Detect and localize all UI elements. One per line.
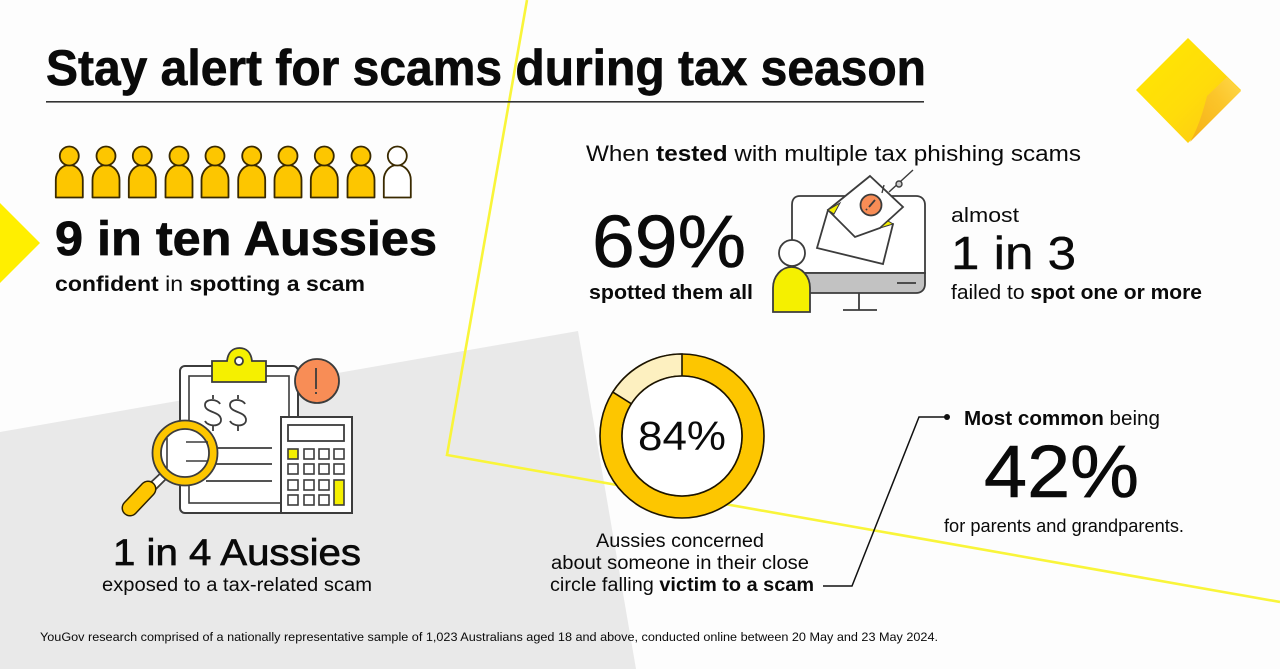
donut chart: 84%: 84% (638, 413, 726, 459)
stat: 1 in 4 Aussies: 1 in 4 Aussies (113, 532, 361, 573)
donut chart: 84% (611, 354, 753, 507)
yellow accent lines (447, 0, 1280, 602)
caption: failed to spot one or more: failed to spot one or more (951, 281, 1202, 304)
caption: Most common being: Most common being (964, 407, 1160, 430)
caption: exposed to a tax-related scam: exposed to a tax-related scam (102, 575, 372, 596)
title: Stay alert for scams during tax season (46, 40, 926, 96)
stat: 42%: 42% (984, 430, 1139, 513)
stat: 1 in 3: 1 in 3 (951, 227, 1076, 279)
caption: Aussies concerned (550, 531, 814, 596)
yellow diamond left edge (0, 203, 40, 283)
caption: almost: almost (951, 204, 1019, 227)
people row icon (56, 146, 411, 198)
caption: Aussies concerned: circle falling victim to a scam (550, 575, 814, 596)
text: almost 1 in 3 (951, 204, 1202, 304)
icon: computer with phishing email (773, 170, 925, 312)
logo: yellow diamond (1136, 38, 1241, 143)
stat: 69%: 69% (592, 200, 746, 283)
grey background panel (0, 331, 636, 669)
caption: spotted them all: spotted them all (589, 281, 753, 304)
caption: confident in spotting a scam: confident in spotting a scam (55, 272, 365, 296)
caption: for parents and grandparents: for parents and grandparents. (944, 515, 1184, 536)
footnote: YouGov research comprised of a nationally representative sample of 1,023 Australians aged 18 and above, conducted online between 20 May and 23 May 2024. (40, 630, 938, 644)
connector line (823, 414, 950, 586)
icon: clipboard, calculator and magnifier (130, 348, 352, 513)
caption: Aussies concerned: Aussies concerned (596, 531, 764, 552)
title rule (46, 101, 924, 103)
heading: phishing test: When tested with multiple tax phishing scams (586, 141, 1081, 166)
caption: Aussies concerned: about someone in their close (551, 553, 809, 574)
stat: 9 in ten Aussies: 9 in ten Aussies (55, 213, 437, 266)
